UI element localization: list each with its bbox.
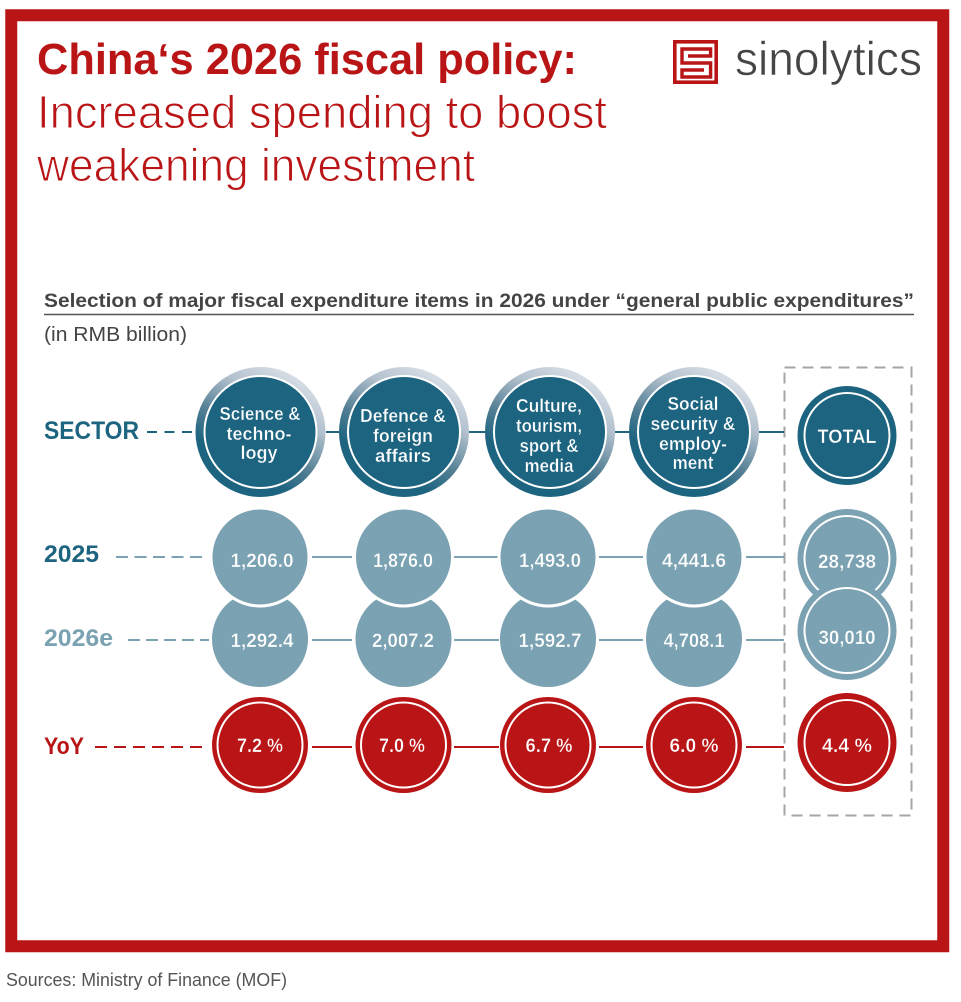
YoY circle: culture — [500, 697, 596, 793]
title: Increased spending to boost — [37, 86, 607, 138]
YoY circle: total — [798, 693, 896, 792]
2026e connector lines — [128, 639, 784, 641]
dashed total box — [784, 368, 912, 816]
unit note: (in RMB billion) — [44, 324, 187, 346]
sector circle: culture, tourism, sport and media — [485, 367, 615, 497]
sector circle: social security and employment: employ- — [659, 434, 727, 454]
icon: logo square — [675, 42, 716, 82]
sector circle: social security and employment: Social — [668, 394, 718, 414]
2026e values — [230, 630, 725, 652]
2025 circles — [211, 508, 743, 606]
sector circle: science and technology: logy — [240, 443, 278, 463]
sector circle: culture, tourism, sport and media: tourism, — [516, 416, 582, 436]
sector circle: defence and foreign affairs — [339, 367, 469, 497]
sector circle: culture, tourism, sport and media: media — [524, 456, 574, 476]
2026e values: 1,292.4 — [230, 630, 294, 652]
2025 connector lines — [116, 556, 784, 558]
total circle: 2026e: 30,010 — [818, 627, 876, 649]
sector circle: science and technology: Science & — [220, 404, 300, 424]
2025 values — [230, 550, 726, 572]
sector connector lines — [147, 431, 784, 433]
YoY circle: defence: 7.0 % — [379, 735, 425, 757]
sector circle: defence and foreign affairs: affairs — [375, 446, 431, 466]
YoY circle: defence — [356, 697, 452, 793]
2026e values: 2,007.2 — [372, 630, 434, 652]
2025 values: 1,206.0 — [230, 550, 294, 572]
chart heading: Selection of major fiscal expenditure items in 2026 under “general public expenditures” — [44, 290, 914, 312]
title: China‘s 2026 fiscal policy: — [37, 35, 577, 84]
YoY connector lines — [95, 746, 784, 748]
2026e circles — [212, 591, 742, 687]
sector circle: culture, tourism, sport and media: Culture, — [516, 396, 582, 416]
sector circle: social security and employment — [629, 367, 759, 497]
sector circle: total: TOTAL — [818, 427, 877, 448]
row label: YoY: YoY — [44, 733, 84, 760]
row: year on year — [44, 693, 896, 793]
row: sector — [44, 367, 896, 497]
sector circle: defence and foreign affairs: Defence & — [360, 406, 446, 426]
YoY circle: total: 4.4 % — [822, 735, 872, 757]
title — [36, 35, 607, 191]
source note: Sources: Ministry of Finance (MOF) — [6, 969, 287, 990]
2025 values: 4,441.6 — [662, 550, 726, 572]
YoY circle: culture: 6.7 % — [526, 735, 572, 757]
2025 values: 1,493.0 — [519, 550, 581, 572]
sector circle: social security and employment: security & — [650, 414, 736, 434]
sector circle: defence and foreign affairs: foreign — [373, 426, 433, 446]
YoY circle: social security: 6.0 % — [670, 735, 718, 757]
YoY circle: science and technology: 7.2 % — [237, 735, 283, 757]
total circle: 2025: 28,738 — [818, 551, 876, 573]
sector circle: science and technology: techno- — [226, 424, 292, 444]
row: 2026e — [44, 591, 784, 687]
row: 2025 — [44, 508, 784, 652]
YoY circle: social security — [646, 697, 742, 793]
sector circle: social security and employment: ment — [672, 453, 714, 473]
total circle: 2025 — [798, 509, 896, 608]
logo: sinolytics — [675, 32, 922, 85]
total circle: 2026e — [798, 581, 896, 680]
logo wordmark: sinolytics — [735, 32, 922, 85]
title: weakening investment — [36, 139, 475, 191]
row label: 2025: 2025 — [44, 541, 99, 568]
2026e values: 4,708.1 — [664, 630, 725, 652]
sector circle: total — [798, 386, 896, 485]
row label: 2026e: 2026e — [44, 625, 113, 652]
row label: sector: SECTOR — [44, 417, 139, 445]
2026e values: 1,592.7 — [518, 630, 582, 652]
sector circle: science and technology — [196, 367, 326, 497]
2025 values: 1,876.0 — [373, 550, 433, 572]
sector circle: culture, tourism, sport and media: sport & — [520, 436, 579, 456]
YoY circle: science and technology — [212, 697, 308, 793]
